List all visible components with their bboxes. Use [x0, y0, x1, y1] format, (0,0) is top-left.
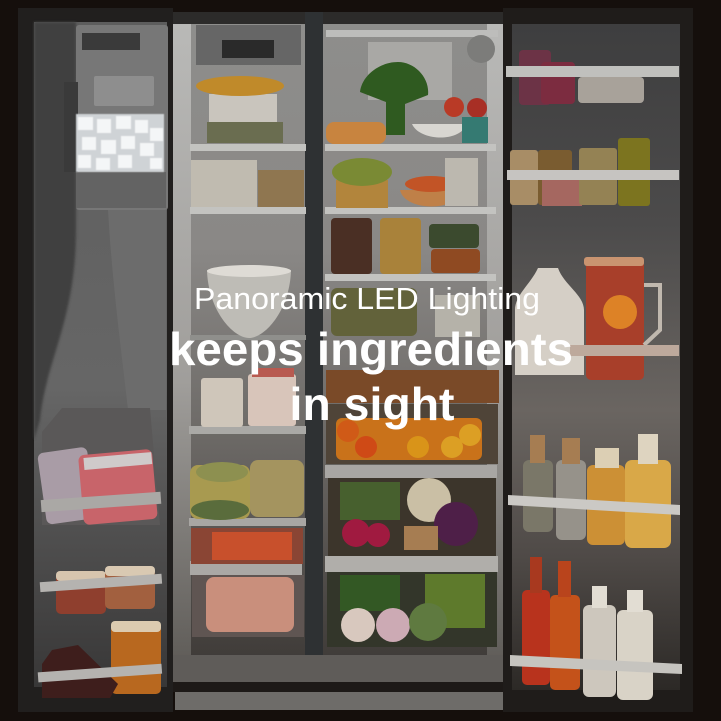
door shelf contents: sauces and dressings — [510, 557, 682, 700]
title line: keeps ingredients: keeps ingredients — [169, 323, 573, 375]
food: glass containers — [331, 218, 480, 274]
food: canisters — [201, 368, 296, 427]
door shelf contents: bottles — [508, 434, 680, 548]
door shelf contents: pickle jars — [507, 138, 679, 206]
panel: left door — [18, 8, 173, 712]
panel: right door — [503, 8, 693, 712]
food: salad container — [331, 288, 480, 337]
drawer: greens — [327, 572, 497, 647]
door shelf contents: top jars — [506, 50, 679, 105]
bin: cups — [40, 566, 162, 614]
title line: Panoramic LED Lighting: Panoramic LED Lighting — [194, 281, 540, 316]
food: grapes and citrus — [332, 158, 478, 208]
ice dispenser — [64, 25, 168, 210]
title — [169, 281, 573, 430]
panel: fridge compartment — [173, 12, 503, 710]
food: crate and pastries — [191, 160, 304, 207]
food: white bowl — [207, 265, 291, 338]
shelves — [189, 144, 498, 575]
ice cubes — [76, 114, 164, 172]
drawer: vegetables — [328, 478, 496, 556]
bin: meat and jar — [38, 621, 162, 698]
drawer: meat — [191, 528, 304, 637]
title line: in sight: in sight — [290, 378, 454, 430]
door shelf contents: milk and pitcher — [515, 257, 679, 380]
food: vegetables and produce — [190, 460, 304, 520]
food: cutting board — [326, 370, 499, 403]
food: herbs, eggs and berries — [326, 62, 488, 144]
bin: freezer bags — [37, 408, 161, 525]
drawer: citrus — [326, 404, 498, 464]
food: pie and casseroles — [196, 76, 284, 143]
